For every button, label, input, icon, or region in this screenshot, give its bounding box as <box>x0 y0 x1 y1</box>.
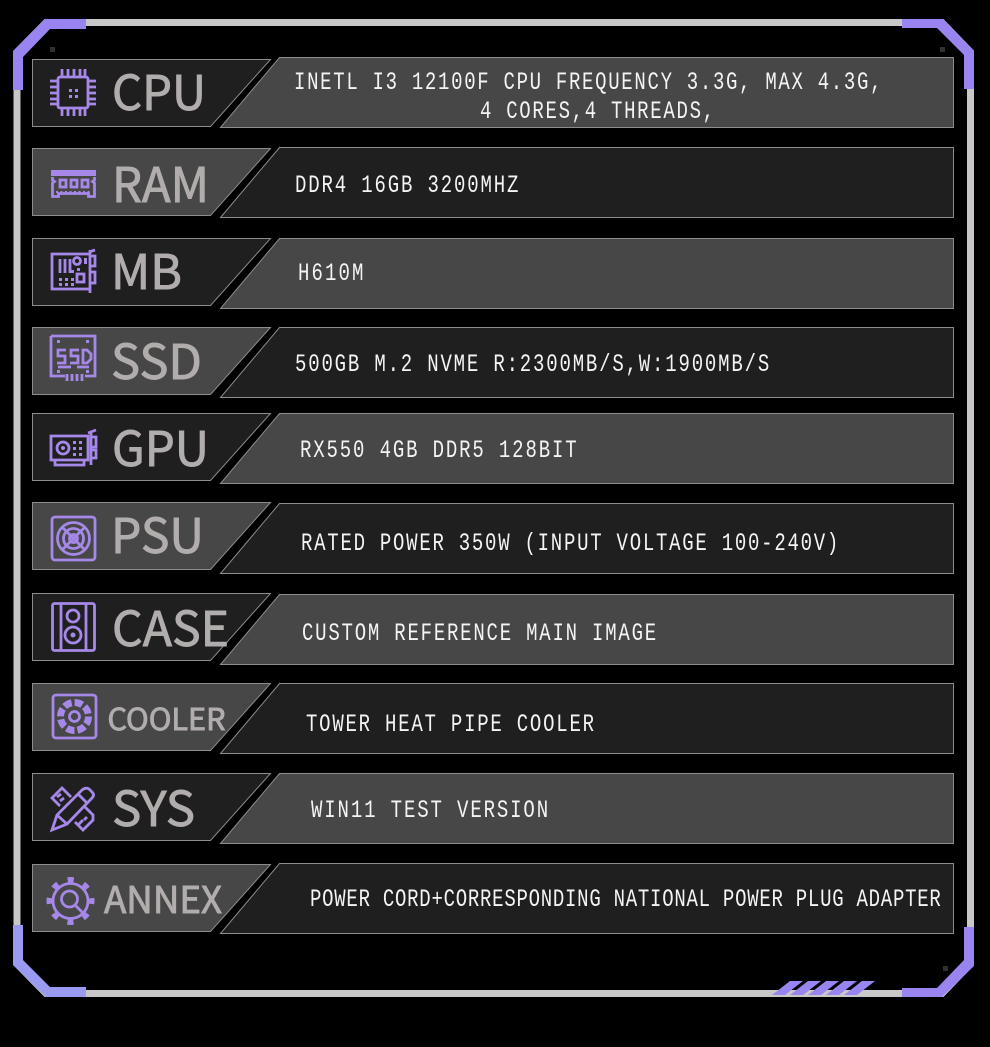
icon: computer case <box>52 604 94 650</box>
SSD value panel <box>220 328 954 398</box>
frame dot: bottom right <box>943 966 948 971</box>
CPU value text: 4 CORES,4 THREADS, <box>480 98 714 126</box>
ANNEX label panel <box>32 864 270 932</box>
ANNEX value panel <box>220 864 954 934</box>
icon: pencil and ruler <box>52 788 94 830</box>
MB label panel <box>32 238 270 306</box>
PSU label panel <box>32 502 270 570</box>
corner accent: top right <box>902 19 974 89</box>
RAM label panel <box>32 148 270 216</box>
icon: motherboard <box>52 250 95 293</box>
row: SYS <box>32 770 954 844</box>
icon: gear with magnifier <box>50 880 92 922</box>
row: GPU <box>32 410 954 484</box>
PSU value text: RATED POWER 350W (INPUT VOLTAGE 100-240V) <box>301 530 838 558</box>
MB heading: MB <box>111 233 182 303</box>
GPU heading: GPU <box>112 410 209 480</box>
SSD heading: SSD <box>111 323 202 393</box>
GPU value panel <box>220 414 954 484</box>
row: SSD <box>32 323 954 398</box>
SSD label panel <box>32 328 270 394</box>
corner accent: bottom right <box>902 927 974 997</box>
RAM value text: DDR4 16GB 3200MHZ <box>295 172 518 200</box>
COOLER value text: TOWER HEAT PIPE COOLER <box>306 711 594 739</box>
GPU label panel <box>32 414 270 480</box>
ANNEX heading: ANNEX <box>104 870 222 924</box>
CPU value text <box>294 69 881 126</box>
icon: CPU chip <box>50 69 96 116</box>
SYS value panel <box>220 774 954 844</box>
row: MB <box>32 233 954 308</box>
CASE heading: CASE <box>112 590 229 660</box>
RAM value panel <box>220 148 954 218</box>
SYS label panel <box>32 774 270 840</box>
row: CASE <box>32 590 954 664</box>
corner accent: top left <box>13 19 86 90</box>
frame dot: top right <box>940 47 945 52</box>
SYS value text: WIN11 TEST VERSION <box>311 797 548 825</box>
CPU value panel <box>220 58 954 128</box>
frame dot: top left <box>50 47 55 52</box>
MB value text: H610M <box>298 260 363 288</box>
ANNEX value text: POWER CORD+CORRESPONDING NATIONAL POWER PLUG ADAPTER <box>310 886 941 914</box>
CASE value text: CUSTOM REFERENCE MAIN IMAGE <box>302 620 656 648</box>
GPU value text: RX550 4GB DDR5 128BIT <box>300 437 577 465</box>
row: CPU <box>32 54 954 128</box>
corner accent: bottom left <box>13 925 86 997</box>
SSD value text: 500GB M.2 NVME R:2300MB/S,W:1900MB/S <box>295 351 769 379</box>
row: COOLER <box>32 684 954 754</box>
CPU value text: INETL I3 12100F CPU FREQUENCY 3.3G, MAX 4.3G, <box>294 69 881 97</box>
icon: cooler fan <box>53 695 96 738</box>
MB value panel <box>220 238 954 308</box>
row: RAM <box>32 146 954 218</box>
COOLER value panel <box>220 684 954 754</box>
row: PSU <box>32 497 954 574</box>
COOLER label panel <box>32 684 270 750</box>
RAM heading: RAM <box>112 146 209 216</box>
CPU heading: CPU <box>112 54 206 124</box>
CASE value panel <box>220 594 954 664</box>
SYS heading: SYS <box>112 770 195 840</box>
PSU value panel <box>220 504 954 574</box>
stripes accent <box>772 981 875 995</box>
row: ANNEX <box>32 864 954 934</box>
CASE label panel <box>32 594 270 660</box>
COOLER heading: COOLER <box>108 695 226 739</box>
icon: power supply fan <box>52 517 95 560</box>
icon: SSD drive <box>51 336 95 381</box>
icon: graphics card <box>51 430 96 465</box>
PSU heading: PSU <box>111 497 204 567</box>
icon: RAM stick <box>51 170 96 196</box>
CPU label panel <box>32 60 270 126</box>
